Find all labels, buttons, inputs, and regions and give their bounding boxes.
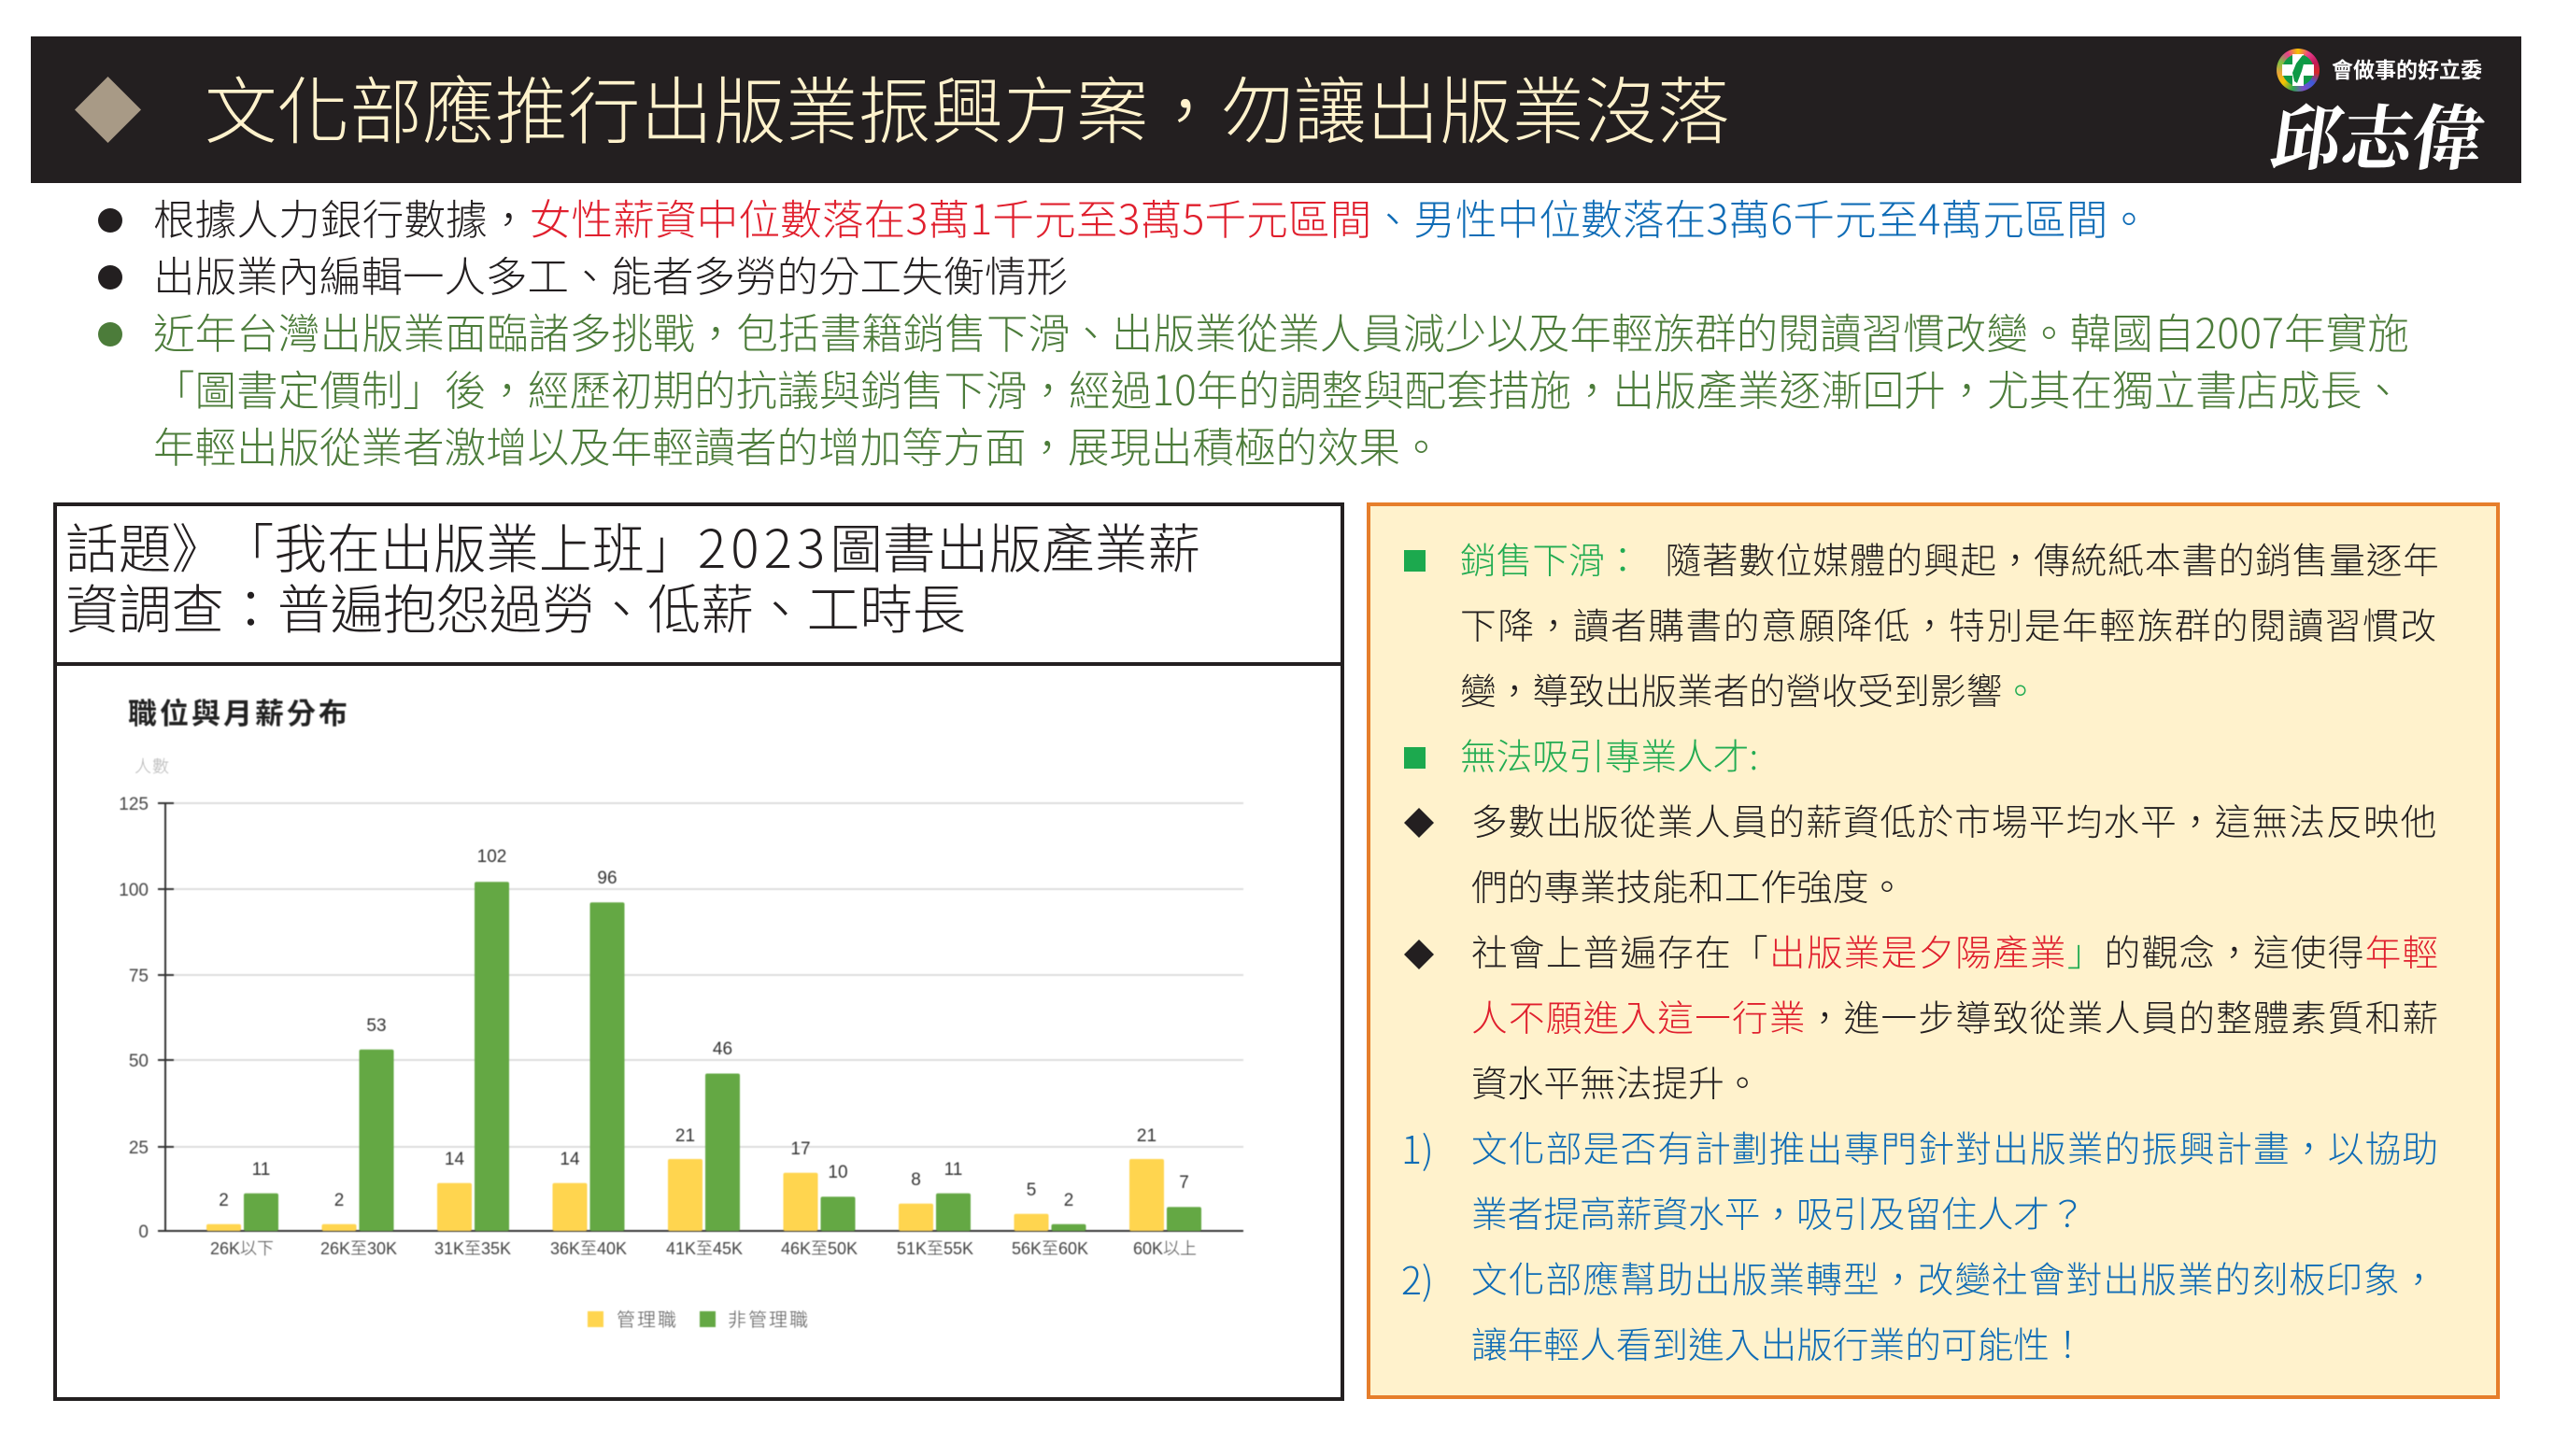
value labels: 2 <box>334 1191 344 1210</box>
value labels <box>219 847 1189 1210</box>
text block: sunset industry: 社會上普遍存在「出版業是夕陽產業」的觀念，這使得年輕 <box>1471 925 2439 977</box>
value labels: 5 <box>1027 1180 1036 1200</box>
bars: non-management <box>244 882 1201 1231</box>
category labels: 36K至40K <box>550 1239 627 1258</box>
value labels: 11 <box>944 1160 962 1180</box>
category labels: 46K至50K <box>781 1239 858 1258</box>
category labels: 26K至30K <box>320 1239 397 1258</box>
text block: sales decline <box>1404 532 2440 715</box>
y axis: 125 <box>119 795 149 814</box>
logo: legislator branding <box>2264 49 2492 184</box>
value labels: 21 <box>675 1126 695 1146</box>
value labels: 21 <box>1137 1126 1156 1146</box>
category labels: 26K以下 <box>210 1239 274 1258</box>
question 2 <box>1401 1250 2437 1369</box>
question 2: 文化部應幫助出版業轉型，改變社會對出版業的刻板印象， <box>1471 1251 2437 1304</box>
value labels: 53 <box>366 1016 387 1036</box>
text block: low pay <box>1404 794 2437 912</box>
text block: low pay: 們的專業技能和工作強度。 <box>1471 859 1905 912</box>
category labels: 31K至35K <box>434 1239 511 1258</box>
legend: 非管理職 <box>728 1309 810 1331</box>
bullet 2: 出版業內編輯一人多工、能者多勞的分工失衡情形 <box>153 243 1068 304</box>
tagline: 會做事的好立委 <box>2332 52 2482 84</box>
y axis title: 人數 <box>135 757 170 776</box>
category labels <box>210 1239 1197 1258</box>
question 1: 業者提高薪資水平，吸引及留住人才？ <box>1471 1186 2086 1238</box>
value labels: 8 <box>911 1170 921 1190</box>
text block: sunset industry: 人不願進入這一行業，進一步導致從業人員的整體素質和薪 <box>1471 990 2439 1042</box>
y axis: 50 <box>129 1052 149 1071</box>
text block: sunset industry <box>1404 925 2439 1108</box>
panel heading: 話題》 「我在出版業上班」2023圖書出版產業薪 <box>65 507 1200 584</box>
value labels: 7 <box>1179 1173 1189 1193</box>
text block: sunset industry: 資水平無法提升。 <box>1471 1055 1760 1108</box>
header bar <box>31 36 2521 183</box>
name: 邱志偉 <box>2264 82 2492 184</box>
category labels: 60K以上 <box>1133 1239 1197 1258</box>
question 2: 2) <box>1401 1250 1434 1306</box>
bullet 3: Taiwan and Korea context: 年輕出版從業者激增以及年輕讀者的增加等方面，展現出積極的效果。 <box>153 414 1442 474</box>
title: 文化部應推行出版業振興方案，勿讓出版業沒落 <box>205 54 1730 159</box>
question 2: 讓年輕人看到進入出版行業的可能性！ <box>1471 1317 2086 1369</box>
text block: sales decline: 下降，讀者購書的意願降低，特別是年輕族群的閱讀習慣改 <box>1460 598 2438 650</box>
bullet 3: Taiwan and Korea context: 近年台灣出版業面臨諸多挑戰，包括書籍銷售下滑、出版業從業人員減少以及年輕族群的閱讀習慣改變。韓國自2007年實施 <box>153 300 2409 360</box>
panel heading <box>57 506 1341 666</box>
question 1: 1) <box>1401 1119 1434 1175</box>
icon: party emblem <box>2277 49 2320 92</box>
y axis: 0 <box>138 1223 149 1242</box>
panel: salary survey <box>53 502 1344 1401</box>
legend: 管理職 <box>617 1309 678 1331</box>
bullet 1: 根據人力銀行數據，女性薪資中位數落在3萬1千元至3萬5千元區間、男性中位數落在3萬6千元至4萬元區間。 <box>153 186 2150 247</box>
text block: low pay: 多數出版從業人員的薪資低於市場平均水平，這無法反映他 <box>1471 794 2437 846</box>
value labels: 14 <box>560 1150 580 1169</box>
panel: analysis and questions <box>1367 502 2500 1399</box>
legend <box>588 1309 810 1331</box>
icon: header diamond <box>75 77 141 143</box>
value labels: 46 <box>713 1039 732 1059</box>
category labels: 51K至55K <box>897 1239 973 1258</box>
value labels: 14 <box>445 1150 464 1169</box>
value labels: 11 <box>252 1160 270 1180</box>
text block: sales decline: 變，導致出版業者的營收受到影響。 <box>1460 663 2038 715</box>
bullet 3: Taiwan and Korea context: 「圖書定價制」後，經歷初期的抗議與銷售下滑，經過10年的調整與配套措施，出版產業逐漸回升，尤其在獨立書店成長、 <box>153 357 2404 417</box>
y axis: 100 <box>119 881 149 900</box>
category labels: 56K至60K <box>1012 1239 1088 1258</box>
y axis: 75 <box>129 967 149 986</box>
question 1: 文化部是否有計劃推出專門針對出版業的振興計畫，以協助 <box>1471 1121 2439 1173</box>
value labels: 102 <box>477 847 506 867</box>
panel heading: 資調查：普遍抱怨過勞、低薪、工時長 <box>65 568 966 644</box>
value labels: 17 <box>790 1139 811 1159</box>
bar chart: position and monthly salary distribution <box>119 698 1244 1331</box>
chart title: 職位與月薪分布 <box>128 698 350 730</box>
question 1 <box>1401 1119 2439 1238</box>
text block: talent heading: 無法吸引專業人才: <box>1460 728 1758 781</box>
text block: sales decline: 銷售下滑： 隨著數位媒體的興起，傳統紙本書的銷售量逐年 <box>1460 532 2440 585</box>
y axis <box>119 795 1243 1242</box>
value labels: 96 <box>597 869 617 888</box>
value labels: 10 <box>828 1163 848 1182</box>
value labels: 2 <box>219 1191 229 1210</box>
bullet list: summary <box>98 186 2409 474</box>
bullet 3: Taiwan and Korea context <box>98 300 2409 474</box>
bars: management <box>206 1159 1164 1231</box>
category labels: 41K至45K <box>666 1239 743 1258</box>
value labels: 2 <box>1064 1191 1073 1210</box>
y axis: 25 <box>129 1138 149 1158</box>
